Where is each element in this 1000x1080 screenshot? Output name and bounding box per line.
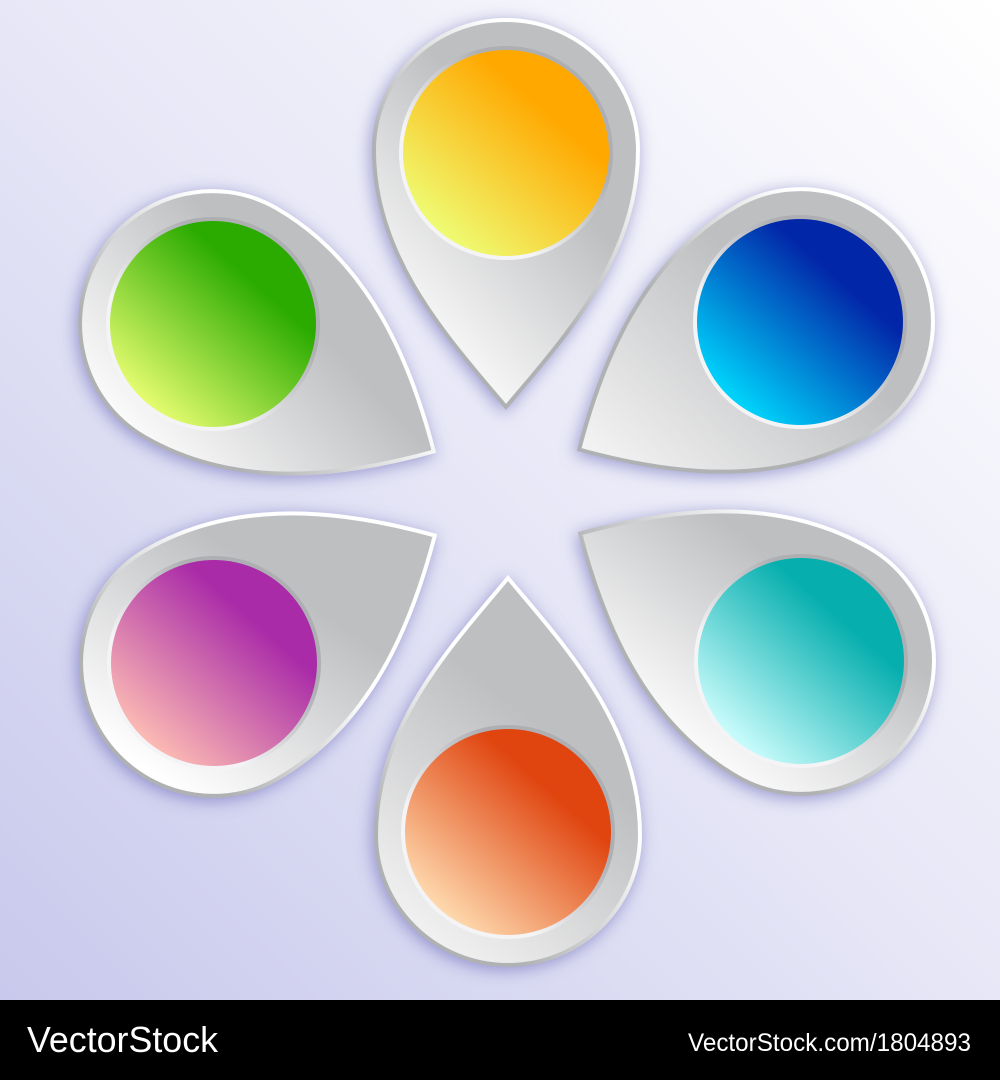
petal: teal lower right (514, 419, 982, 842)
petal: green upper left (32, 143, 500, 566)
petal: yellow top (374, 20, 638, 407)
petal: magenta lower left (33, 421, 501, 844)
petal: blue upper right (513, 141, 981, 564)
footer bar: VectorStock.com/1804893 (688, 1029, 971, 1057)
footer bar: VectorStock (27, 1019, 219, 1060)
petal: orange bottom (376, 578, 640, 965)
footer bar (0, 1000, 1000, 1080)
